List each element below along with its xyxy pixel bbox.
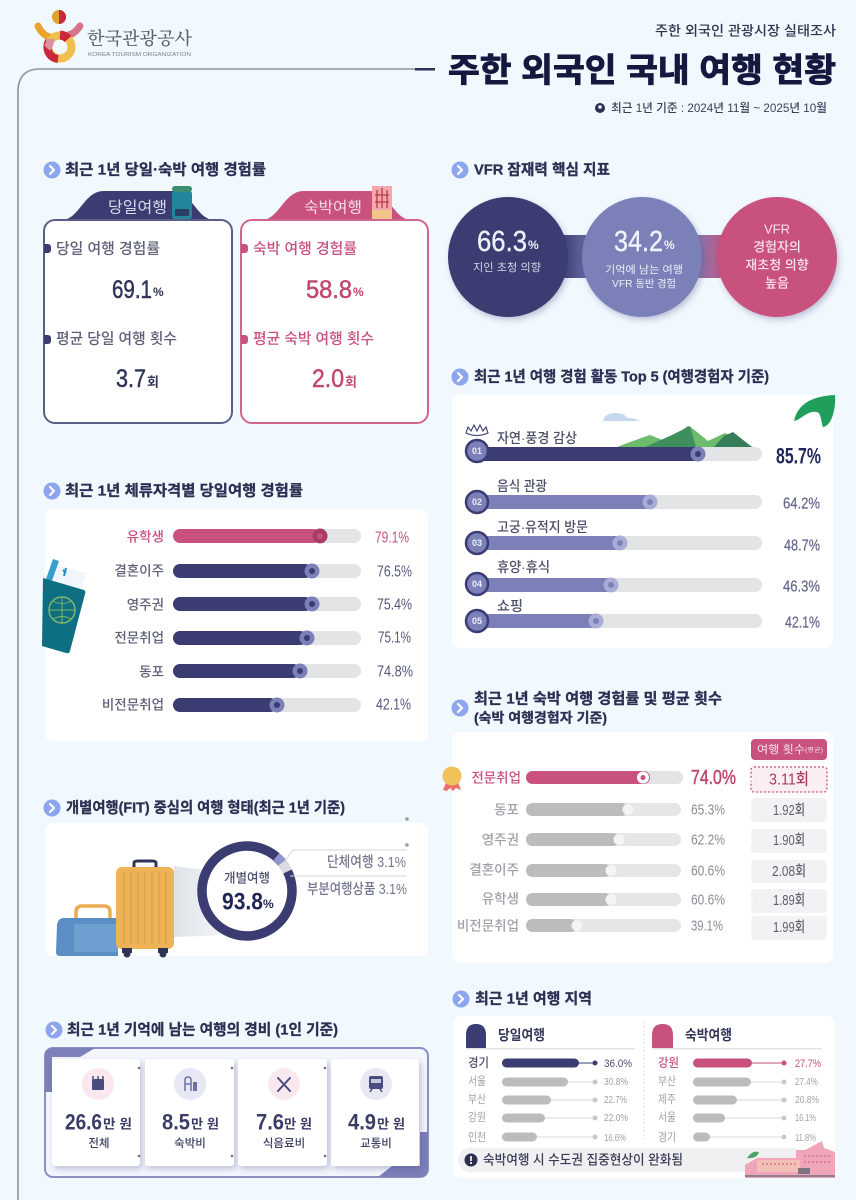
row: professional employment: 전문취업 xyxy=(114,630,164,646)
card: transport: 만 원 xyxy=(377,1116,405,1132)
row: Gangwon: 27.7% xyxy=(795,1058,821,1070)
panel: travel regions xyxy=(453,1016,835,1178)
row 03: 03 xyxy=(472,538,482,548)
section heading: VFR: VFR 잠재력 핵심 지표 xyxy=(474,162,610,178)
row: permanent residents: 75.4% xyxy=(377,596,412,614)
metric: day trip rate: 당일 여행 경험률 xyxy=(56,240,160,258)
row 05 xyxy=(466,598,820,632)
callout: group tour: 단체여행 3.1% xyxy=(327,854,406,871)
icon: bed xyxy=(174,1068,206,1100)
row 05: 05 xyxy=(472,616,482,626)
row: Gyeonggi: 11.8% xyxy=(795,1132,816,1144)
callout: partial package xyxy=(290,876,407,898)
circle: reinvitation intent: 높음 xyxy=(765,276,789,290)
row 03 xyxy=(466,519,820,554)
row: overseas Koreans: 동포 xyxy=(494,802,519,818)
metric: average day trips xyxy=(44,330,177,393)
logo: Korea Tourism Organization: 한국관광공사 xyxy=(87,26,192,50)
row: Gangwon: 강원 xyxy=(658,1056,679,1070)
section heading: day trip and overnight experience: 최근 1년 당일·숙박 여행 경험률 xyxy=(65,162,266,178)
metric: average day trips: 회 xyxy=(147,374,159,390)
row: non-professional employment xyxy=(457,916,827,940)
row: professional employment xyxy=(114,630,411,646)
row: students xyxy=(127,528,409,546)
row: non-professional employment: 비전문취업 xyxy=(457,918,519,934)
row 04: 46.3% xyxy=(783,578,820,596)
row: Seoul: 서울 xyxy=(468,1075,486,1088)
tab: day trip: 당일여행 xyxy=(108,198,167,216)
row: Gangwon xyxy=(468,1110,628,1124)
icon: cloud xyxy=(603,413,640,421)
section heading: trip expenses: 최근 1년 기억에 남는 여행의 경비 (1인 기준) xyxy=(67,1022,338,1038)
circle: VFR companion experience xyxy=(582,197,702,317)
card: food xyxy=(238,1059,327,1166)
header: survey name: 주한 외국인 관광시장 실태조사 xyxy=(655,24,837,38)
circle: reinvitation intent: VFR xyxy=(764,222,790,236)
card: food: 7.6 xyxy=(256,1110,284,1134)
row 02: 02 xyxy=(472,497,482,507)
card: total: 26.6 xyxy=(65,1110,102,1134)
chart: FIT donut: 93.8 xyxy=(222,888,263,916)
row: permanent residents: 1.90회 xyxy=(773,832,805,849)
metric: day trip rate: % xyxy=(153,285,164,299)
card: accommodation: 8.5 xyxy=(162,1110,190,1134)
card: accommodation: 숙박비 xyxy=(174,1137,206,1150)
row: overseas Koreans: 동포 xyxy=(139,664,164,680)
icon: leaf xyxy=(794,395,835,427)
shadow behind luggage xyxy=(174,866,230,937)
icon: overnight arch xyxy=(652,1024,673,1049)
row: students: 60.6% xyxy=(691,892,725,908)
row: Gyeonggi: 36.0% xyxy=(604,1058,632,1070)
row: Seoul: 서울 xyxy=(658,1111,676,1124)
row: marriage immigrants xyxy=(469,860,827,883)
icon: passport xyxy=(42,559,86,653)
metric: average overnight trips: 평균 숙박 여행 횟수 xyxy=(253,330,374,348)
row: overseas Koreans xyxy=(494,798,827,822)
row: overseas Koreans xyxy=(139,664,413,680)
chart: FIT donut: 개별여행 xyxy=(224,870,270,886)
callout: note on overnight trips: 숙박여행 시 수도권 집중현상이 완화됨 xyxy=(483,1152,683,1168)
row: professional employment xyxy=(471,767,827,792)
column header: trip count: (평균) xyxy=(805,746,823,754)
row: professional employment: 75.1% xyxy=(378,630,411,646)
connector dots: cards 1-2 xyxy=(138,1067,149,1157)
card: accommodation: 만 원 xyxy=(191,1116,219,1132)
metric: overnight rate: % xyxy=(353,285,364,299)
row: Incheon xyxy=(468,1130,626,1144)
section heading: FIT: 개별여행(FIT) 중심의 여행 형태(최근 1년 기준) xyxy=(66,800,345,816)
column header: trip count: 여행 횟수 xyxy=(757,743,805,756)
row: Busan xyxy=(468,1093,627,1106)
row 01: 01 xyxy=(472,446,482,456)
row 03: 48.7% xyxy=(784,538,820,554)
row: Busan: 부산 xyxy=(468,1093,486,1106)
row 02: 음식 관광 xyxy=(497,478,547,494)
row: Jeju xyxy=(658,1093,819,1106)
row: professional employment: 3.11회 xyxy=(769,770,809,788)
metric: overnight rate: 58.8 xyxy=(306,276,352,304)
row: non-professional employment: 42.1% xyxy=(376,696,411,714)
panel: overnight trip xyxy=(241,186,428,423)
row: Busan: 부산 xyxy=(658,1075,676,1088)
circle: VFR companion experience: 기억에 남는 여행 xyxy=(605,264,683,276)
row: Gyeonggi xyxy=(658,1130,816,1144)
row: Seoul xyxy=(468,1075,628,1088)
panel: day trips by visa status xyxy=(42,509,428,741)
illustration: palace building xyxy=(745,1141,835,1178)
chart: VFR linked circles xyxy=(448,197,837,317)
main title: 주한 외국인 국내 여행 현황 xyxy=(448,52,836,88)
row: overseas Koreans: 65.3% xyxy=(691,802,725,818)
frame line xyxy=(18,69,415,1200)
metric: average overnight trips xyxy=(241,330,374,393)
chart: FIT donut xyxy=(202,846,292,936)
row: non-professional employment: 1.99회 xyxy=(773,919,805,936)
panel: day trip xyxy=(44,186,232,423)
column: overnight regions xyxy=(652,1024,822,1144)
row: marriage immigrants: 2.08회 xyxy=(772,863,806,880)
card: transport xyxy=(331,1059,419,1166)
row 01 xyxy=(466,430,821,468)
logo: Korea Tourism Organization xyxy=(38,10,192,59)
row: Gangwon: 강원 xyxy=(468,1110,486,1124)
row: marriage immigrants: 결혼이주 xyxy=(469,862,519,878)
callout: note on overnight trips xyxy=(458,1148,803,1172)
section heading: top 5 activities: 최근 1년 여행 경험 활동 Top 5 (여행경험자 기준) xyxy=(474,368,769,386)
row: permanent residents: 영주권 xyxy=(127,598,164,612)
circle: invitation intent: % xyxy=(528,238,539,252)
row: permanent residents xyxy=(127,596,412,614)
tab: overnight trip: 숙박여행 xyxy=(304,198,362,216)
row 01: 자연·풍경 감상 xyxy=(497,430,577,446)
row: marriage immigrants xyxy=(114,564,412,580)
circle: VFR companion experience: VFR 동반 경험 xyxy=(612,277,676,290)
circle: reinvitation intent: 재초청 의향 xyxy=(745,258,809,272)
column: day trip regions: 당일여행 xyxy=(498,1027,545,1043)
circle: reinvitation intent: 경험자의 xyxy=(753,240,801,254)
icon: crown xyxy=(466,425,488,436)
row: Gangwon: 22.0% xyxy=(604,1112,628,1124)
row: Gyeonggi: 경기 xyxy=(658,1130,676,1144)
row: Busan: 27.4% xyxy=(795,1076,818,1088)
row: Busan: 22.7% xyxy=(604,1094,627,1106)
row: non-professional employment: 비전문취업 xyxy=(102,698,164,712)
row 02 xyxy=(466,478,820,513)
connector dots: cards 3-4 xyxy=(324,1067,335,1157)
tab: day trip xyxy=(63,186,213,220)
panel: top 5 activities xyxy=(452,395,835,648)
row: marriage immigrants: 76.5% xyxy=(377,564,412,580)
column header: trip count xyxy=(751,739,827,760)
card: accommodation xyxy=(145,1059,234,1166)
metric: overnight rate: 숙박 여행 경험률 xyxy=(253,240,357,258)
panel: FIT xyxy=(45,817,428,958)
row: Incheon: 16.6% xyxy=(604,1132,626,1144)
row 05: 쇼핑 xyxy=(497,598,523,614)
metric: day trip rate: 69.1 xyxy=(112,276,152,304)
row: permanent residents: 영주권 xyxy=(482,832,519,848)
circle: invitation intent: 지인 초청 의향 xyxy=(473,261,541,274)
connector dots: cards 2-3 xyxy=(231,1067,242,1157)
row: students xyxy=(482,889,827,913)
card: food: 식음료비 xyxy=(263,1137,305,1150)
row: marriage immigrants: 결혼이주 xyxy=(114,564,164,578)
row 01: 85.7% xyxy=(776,444,821,468)
circle: VFR companion experience: % xyxy=(664,238,675,252)
circle: VFR companion experience: 34.2 xyxy=(614,226,663,258)
row: Gyeonggi xyxy=(468,1056,632,1070)
row 04: 04 xyxy=(472,579,482,589)
callout: group tour xyxy=(284,817,409,871)
row 02: 64.2% xyxy=(783,496,820,512)
section heading: day trips by visa status: 최근 1년 체류자격별 당일여행 경험률 xyxy=(65,482,303,500)
row 04: 휴양·휴식 xyxy=(497,559,550,575)
row: professional employment: 74.0% xyxy=(691,767,736,789)
logo: Korea Tourism Organization: KOREA TOURISM ORGANIZATION xyxy=(88,52,191,58)
icon: wallet xyxy=(82,1068,114,1100)
icon: fork and knife xyxy=(268,1068,300,1100)
row: Seoul: 30.8% xyxy=(604,1076,628,1088)
illustration: mountains xyxy=(617,426,753,447)
row: non-professional employment xyxy=(102,696,411,714)
card: total: 만 원 xyxy=(103,1116,132,1132)
icon: day trip arch xyxy=(466,1024,486,1049)
callout: partial package: 부분여행상품 3.1% xyxy=(307,881,407,898)
section heading: overnight rate and count: (숙박 여행경험자 기준) xyxy=(474,710,607,726)
reference period: 최근 1년 기준 : 2024년 11월 ~ 2025년 10월 xyxy=(611,101,827,115)
section heading: travel regions: 최근 1년 여행 지역 xyxy=(475,990,592,1008)
row: Incheon: 인천 xyxy=(468,1130,486,1144)
row: Busan xyxy=(658,1075,818,1088)
metric: average day trips: 3.7 xyxy=(116,365,146,393)
row 04 xyxy=(466,559,820,596)
card: food: 만 원 xyxy=(284,1116,312,1132)
column: day trip regions xyxy=(466,1024,635,1144)
card: transport: 교통비 xyxy=(360,1137,392,1150)
metric: average day trips: 평균 당일 여행 횟수 xyxy=(56,330,177,348)
row: students: 유학생 xyxy=(482,892,519,906)
metric: overnight rate xyxy=(241,240,364,304)
panel: overnight rate and count xyxy=(442,732,833,963)
metric: average overnight trips: 회 xyxy=(345,374,357,390)
card: total xyxy=(52,1059,140,1166)
panel: trip expenses xyxy=(45,1048,428,1177)
row: Seoul xyxy=(658,1111,816,1124)
metric: day trip rate xyxy=(44,240,164,304)
row: professional employment: 전문취업 xyxy=(471,770,521,786)
row: Gangwon xyxy=(658,1056,821,1070)
row: permanent residents xyxy=(482,829,827,853)
row: students: 79.1% xyxy=(375,530,409,546)
icon: medal xyxy=(442,766,462,791)
row: overseas Koreans: 1.92회 xyxy=(773,802,805,819)
circle: invitation intent xyxy=(448,197,568,317)
header dash xyxy=(415,68,435,70)
column: overnight regions: 숙박여행 xyxy=(685,1027,732,1043)
card: total: 전체 xyxy=(88,1137,110,1150)
row: Gyeonggi: 경기 xyxy=(468,1056,489,1070)
row: overseas Koreans: 74.8% xyxy=(377,664,413,680)
tab: overnight trip xyxy=(263,186,410,220)
icon: train xyxy=(360,1068,392,1100)
row: permanent residents: 62.2% xyxy=(691,832,725,848)
row: marriage immigrants: 60.6% xyxy=(691,862,725,880)
section heading: overnight rate and count: 최근 1년 숙박 여행 경험률 및 평균 횟수 xyxy=(474,690,722,708)
row: students: 유학생 xyxy=(127,530,164,544)
section heading: overnight rate and count xyxy=(452,690,722,726)
card: transport: 4.9 xyxy=(348,1110,376,1134)
row: non-professional employment: 39.1% xyxy=(691,918,723,934)
icon: duffel bag xyxy=(56,906,118,956)
row: Jeju: 20.8% xyxy=(795,1094,819,1106)
row: Seoul: 16.1% xyxy=(795,1112,816,1124)
circle: reinvitation intent xyxy=(717,197,837,317)
metric: average overnight trips: 2.0 xyxy=(312,365,344,393)
chart: FIT donut: % xyxy=(263,897,274,911)
row: students: 1.89회 xyxy=(773,892,805,909)
row: Jeju: 제주 xyxy=(658,1093,676,1106)
row 05: 42.1% xyxy=(785,614,820,632)
circle: invitation intent: 66.3 xyxy=(477,226,527,258)
icon: suitcase xyxy=(116,861,174,958)
row 03: 고궁·유적지 방문 xyxy=(497,519,588,535)
